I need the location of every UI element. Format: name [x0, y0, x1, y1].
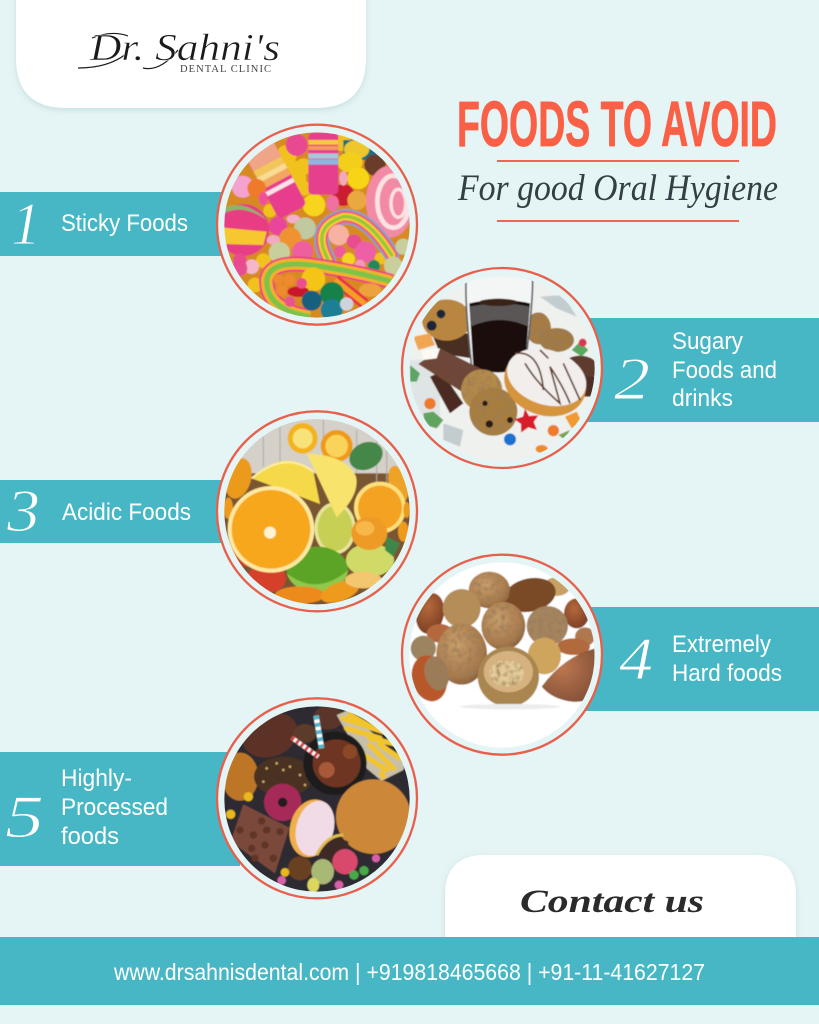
cookies behind [526, 312, 551, 344]
logo card: DENTAL CLINIC [180, 64, 271, 75]
banner 4: extremely hard foods: 4 [619, 626, 653, 692]
banner 2: sugary foods and drinks: 2 [614, 346, 650, 412]
banner 4: extremely hard foods: Extremely [672, 631, 771, 658]
banner 2: sugary foods and drinks: drinks [672, 385, 733, 412]
glass [466, 308, 530, 359]
banner 5: highly processed foods: foods [61, 823, 119, 850]
fries [337, 710, 405, 781]
footer contact bar: www.drsahnisdental.com | +919818465668 | +91-11-41627127 [113, 959, 705, 985]
chocolate [430, 372, 463, 413]
striped ball [217, 204, 269, 256]
banner 1: sticky foods: 1 [11, 191, 41, 257]
cookies [461, 369, 502, 411]
banner 5: highly processed foods: 5 [5, 784, 44, 850]
banner 1: sticky foods [0, 191, 225, 257]
banner 2: sugary foods and drinks [585, 318, 819, 422]
banner 3: acidic foods [0, 478, 225, 544]
title: For good Oral Hygiene [457, 168, 778, 209]
banner 1: sticky foods: Sticky Foods [61, 210, 188, 237]
donut [504, 364, 587, 417]
banner 2: sugary foods and drinks: Foods and [672, 357, 777, 384]
drink cup [303, 732, 367, 795]
banner 4: extremely hard foods [585, 607, 819, 711]
logo card: Dr. Sahni's [89, 27, 280, 69]
sprinkles and candies [514, 409, 538, 433]
footer contact bar [0, 937, 819, 1005]
photo circle 4: nuts [402, 555, 602, 755]
photo circle 3: citrus fruits [217, 411, 417, 611]
chocolate bar [231, 804, 289, 873]
banner 5: highly processed foods: Highly- [61, 765, 132, 792]
banner 5: highly processed foods: Processed [61, 794, 168, 821]
contact card: Contact us [520, 884, 704, 920]
photo circle 1: candies [217, 125, 417, 325]
banner 5: highly processed foods [0, 752, 240, 866]
logo card [16, 0, 366, 108]
candy stick right [308, 133, 338, 195]
contact card [445, 855, 796, 937]
title [457, 88, 778, 222]
photo circle 5: processed foods [217, 698, 417, 898]
pink donut [288, 798, 324, 858]
banner 2: sugary foods and drinks: Sugary [672, 328, 743, 355]
rainbow laces [322, 217, 392, 260]
swirl lollipop [366, 166, 414, 238]
straws [316, 716, 322, 748]
banner 4: extremely hard foods: Hard foods [672, 660, 782, 687]
candy stick left [245, 142, 307, 220]
bun [336, 779, 411, 854]
muffin [432, 333, 473, 358]
banner 3: acidic foods: Acidic Foods [62, 499, 191, 526]
banner 3: acidic foods: 3 [6, 478, 40, 544]
photo circle 2: sugary snacks and cola [402, 268, 602, 468]
